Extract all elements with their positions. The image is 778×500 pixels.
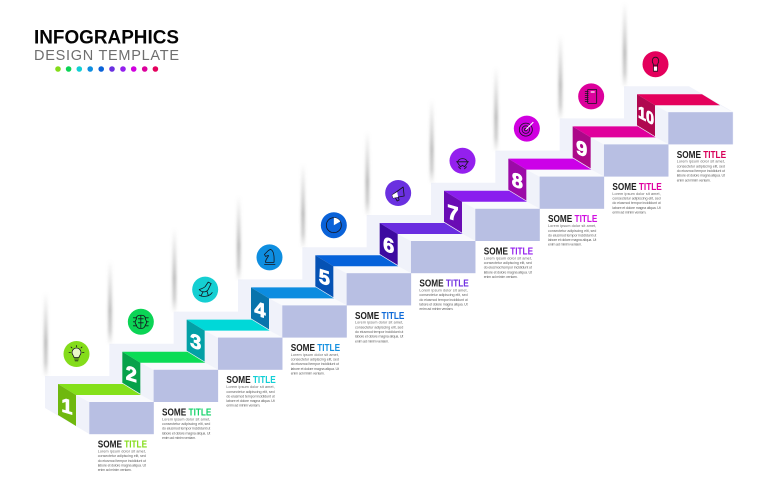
text panel block — [347, 273, 411, 305]
step 3 body: do eiusmod tempor incididunt ut — [226, 394, 275, 398]
icon: brain — [128, 309, 154, 335]
step 10 — [624, 2, 733, 182]
icon: megaphone — [385, 180, 411, 206]
stair front — [187, 320, 205, 362]
step 7 body: do eiusmod tempor incididunt ut — [484, 266, 532, 270]
step 4 body: Lorem ipsum dolor sit amet, — [291, 353, 339, 357]
step 1 body: labore et dolore magna aliqua. Ut — [98, 464, 146, 468]
text panel block — [475, 209, 540, 241]
stair top — [187, 320, 270, 331]
step 6 — [366, 131, 476, 311]
icon: head with gear — [450, 148, 476, 174]
step 3 — [173, 228, 283, 408]
text panel block — [411, 241, 475, 273]
step 8 — [495, 67, 604, 247]
step 5 title: SOME TITLE — [355, 309, 404, 321]
step 4 title: SOME TITLE — [291, 341, 340, 353]
step 8 body — [548, 224, 596, 247]
text panel block — [218, 338, 282, 370]
number 3: 3 — [190, 329, 201, 355]
step 4 body — [291, 353, 339, 376]
text: step 5 — [355, 309, 404, 343]
step 6 body: consectetur adipiscing elit, sed — [419, 293, 468, 297]
step 2 — [109, 260, 218, 440]
number 4: 4 — [254, 297, 266, 323]
colour dots — [55, 66, 158, 72]
step 7 body — [484, 256, 532, 279]
step 5 body — [355, 321, 403, 343]
staircase base — [45, 86, 733, 434]
step 10 body — [677, 160, 725, 182]
step 6 body — [419, 288, 468, 311]
step 3 body — [226, 385, 275, 408]
stair front — [637, 94, 655, 136]
step 1 body: Lorem ipsum dolor sit amet, — [98, 450, 146, 454]
step 5 body: enim ad minim veniam. — [355, 339, 389, 343]
step 2 body — [162, 417, 210, 440]
step 2 body: Lorem ipsum dolor sit amet, — [162, 417, 210, 421]
step 10 body: Lorem ipsum dolor sit amet, — [677, 160, 725, 164]
step 9 body: Lorem ipsum dolor sit amet, — [612, 192, 661, 196]
heading: infographics: INFOGRAPHICS — [34, 26, 179, 48]
number 1: 1 — [61, 394, 73, 420]
step 5 body: Lorem ipsum dolor sit amet, — [355, 321, 403, 325]
stair front — [380, 223, 398, 265]
text panel block — [540, 177, 604, 209]
stair top — [444, 191, 527, 202]
step 9 body: enim ad minim veniam. — [612, 210, 646, 214]
number 5: 5 — [319, 265, 330, 291]
stair top — [315, 255, 398, 266]
step 1 title: SOME TITLE — [98, 438, 147, 450]
step 7 title: SOME TITLE — [484, 244, 533, 257]
step 7 body: enim ad minim veniam. — [484, 275, 518, 279]
number 9: 9 — [576, 136, 587, 162]
step 2 body: consectetur adipiscing elit, sed — [162, 422, 210, 426]
icon: hand holding bulb — [642, 51, 668, 77]
step 4 body: do eiusmod tempor incididunt ut — [291, 362, 339, 366]
icon: light bulb — [64, 341, 90, 367]
step 3 body: enim ad minim veniam. — [226, 404, 260, 408]
icon: chess knight — [256, 244, 282, 270]
step 8 body: labore et dolore magna aliqua. Ut — [548, 238, 596, 242]
icon: target with arrow — [514, 116, 540, 142]
step 1 body: enim ad minim veniam. — [98, 468, 132, 472]
step 5 body: do eiusmod tempor incididunt ut — [355, 330, 403, 334]
stair top — [251, 287, 334, 298]
stair front — [315, 255, 333, 297]
step 8 body: do eiusmod tempor incididunt ut — [548, 233, 596, 237]
step 6 body: labore et dolore magna aliqua. Ut — [419, 303, 468, 307]
step 5 body: labore et dolore magna aliqua. Ut — [355, 335, 403, 339]
stair front — [508, 159, 526, 201]
step 9 body: consectetur adipiscing elit, sed — [612, 197, 661, 201]
step 2 body: do eiusmod tempor incididunt ut — [162, 427, 210, 431]
step 4 — [238, 195, 347, 376]
text: step 8 — [548, 212, 597, 247]
step 9 body — [612, 192, 661, 214]
stair front — [251, 287, 269, 329]
text: step 9 — [612, 180, 662, 214]
number 8: 8 — [512, 168, 523, 194]
step 3 body: labore et dolore magna aliqua. Ut — [226, 399, 275, 403]
stair front — [444, 191, 462, 233]
number 2: 2 — [126, 362, 137, 387]
text panel block — [668, 112, 733, 144]
step 10 title: SOME TITLE — [677, 148, 726, 160]
title — [34, 26, 179, 72]
step 3 body: Lorem ipsum dolor sit amet, — [226, 385, 275, 389]
stair top — [573, 126, 656, 137]
step 1 body: do eiusmod tempor incididunt ut — [98, 459, 146, 463]
step 10 body: enim ad minim veniam. — [677, 178, 711, 182]
step 10 body: labore et dolore magna aliqua. Ut — [677, 174, 725, 178]
step 4 body: labore et dolore magna aliqua. Ut — [291, 367, 339, 371]
stair top — [58, 384, 141, 395]
text panel block — [604, 144, 668, 177]
stair top — [637, 94, 720, 105]
step 8 title: SOME TITLE — [548, 212, 597, 224]
stair top — [508, 159, 591, 170]
step 7 body: labore et dolore magna aliqua. Ut — [484, 270, 532, 274]
step 9 body: labore et dolore magna aliqua. Ut — [612, 206, 661, 210]
step 1 body: consectetur adipiscing elit, sed — [98, 454, 146, 458]
step 10 body: do eiusmod tempor incididunt ut — [677, 169, 725, 173]
step 7 body: consectetur adipiscing elit, sed — [484, 261, 532, 265]
step 6 body: do eiusmod tempor incididunt ut — [419, 298, 468, 302]
stair front — [573, 126, 591, 168]
step 1 body — [98, 450, 146, 472]
text: step 10 — [677, 148, 726, 182]
text panel block — [154, 370, 218, 402]
step 8 body: Lorem ipsum dolor sit amet, — [548, 224, 596, 228]
number 10: 10 — [638, 102, 654, 130]
stair front — [122, 352, 140, 394]
step 2 body: labore et dolore magna aliqua. Ut — [162, 431, 210, 435]
step 5 — [302, 163, 411, 343]
number 7: 7 — [447, 201, 459, 226]
text: step 6 — [419, 277, 469, 311]
step 4 body: enim ad minim veniam. — [291, 372, 325, 376]
step 8 body: enim ad minim veniam. — [548, 243, 582, 247]
text: step 3 — [226, 373, 276, 408]
step 6 title: SOME TITLE — [419, 277, 469, 289]
stair top — [380, 223, 463, 234]
step 9 — [559, 34, 669, 215]
text panel block — [282, 305, 347, 338]
step 9 body: do eiusmod tempor incididunt ut — [612, 201, 661, 205]
subheading: design template: DESIGN TEMPLATE — [34, 48, 179, 64]
stair top — [122, 352, 205, 363]
step 6 body: Lorem ipsum dolor sit amet, — [419, 289, 468, 293]
icon: pie chart — [321, 212, 347, 238]
step 7 — [430, 99, 540, 279]
step 7 body: Lorem ipsum dolor sit amet, — [484, 256, 532, 260]
step 5 body: consectetur adipiscing elit, sed — [355, 325, 403, 329]
text panel block — [89, 402, 154, 434]
text: step 1 — [98, 438, 147, 472]
icon: rocking horse — [192, 277, 218, 303]
number 6: 6 — [383, 233, 394, 259]
text: step 2 — [162, 405, 211, 440]
step 2 body: enim ad minim veniam. — [162, 436, 196, 440]
text: step 7 — [484, 244, 533, 279]
step 4 body: consectetur adipiscing elit, sed — [291, 358, 339, 362]
step 3 body: consectetur adipiscing elit, sed — [226, 390, 275, 394]
step 1 — [44, 292, 154, 472]
stair front — [58, 384, 76, 426]
step 3 title: SOME TITLE — [226, 373, 276, 385]
step 9 title: SOME TITLE — [612, 180, 662, 192]
step 10 body: consectetur adipiscing elit, sed — [677, 164, 725, 168]
icon: notebook — [578, 83, 604, 109]
step 2 title: SOME TITLE — [162, 405, 211, 418]
step 8 body: consectetur adipiscing elit, sed — [548, 229, 596, 233]
text: step 4 — [291, 341, 340, 376]
step 6 body: enim ad minim veniam. — [419, 307, 453, 311]
